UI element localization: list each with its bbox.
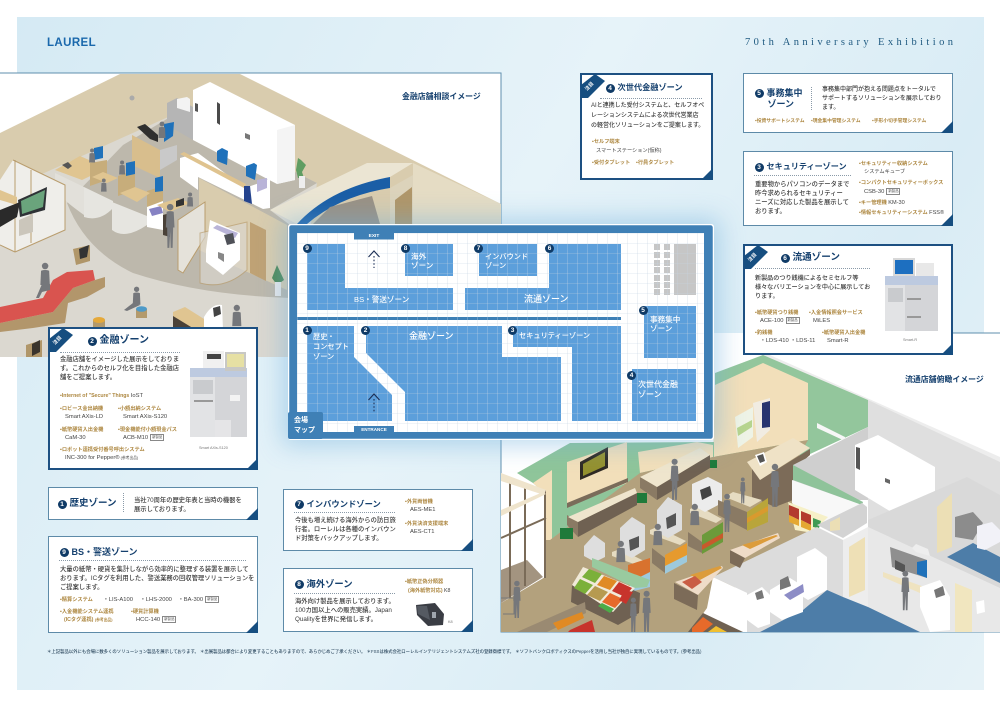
heading: 4 bbox=[608, 84, 612, 92]
counter bbox=[180, 153, 270, 209]
ENTRANCE label: ENTRANCE bbox=[361, 427, 387, 432]
body text: 重要物からパソコンのデータまで bbox=[755, 180, 849, 188]
body text bbox=[60, 356, 179, 380]
marker: zone 6: 6 bbox=[548, 245, 551, 252]
marker: zone 8: 8 bbox=[404, 245, 407, 252]
map label: マップ bbox=[294, 426, 315, 434]
map label bbox=[294, 416, 315, 434]
glass booth bbox=[0, 160, 65, 252]
product list: スマートステーション(仮称) bbox=[596, 148, 661, 154]
zone label: inbound: インバウンド bbox=[485, 252, 528, 261]
badge bbox=[50, 329, 73, 352]
body text bbox=[822, 85, 942, 111]
body text: ド対策をバックアップします。 bbox=[295, 534, 383, 542]
product list: Smart AXis-S120 bbox=[123, 414, 167, 420]
body text: ります。 bbox=[755, 292, 779, 300]
body text: 舗をご提案します。 bbox=[60, 374, 116, 380]
heading: 次世代金融ゾーン bbox=[618, 83, 683, 92]
body text: 事務集中部門が抱える問題点をトータルで bbox=[822, 87, 936, 93]
product list: ▪紙幣硬貨入出金機 bbox=[822, 330, 865, 336]
badge bbox=[582, 75, 605, 98]
gondola D bbox=[718, 500, 747, 530]
badge bbox=[745, 246, 768, 269]
product list: ▪ロビース金出納機 bbox=[60, 406, 103, 412]
machine: Smart-R bbox=[885, 258, 938, 331]
zone label: history bbox=[313, 332, 349, 361]
heading: セキュリティーゾーン bbox=[766, 162, 847, 171]
marker: zone 3 bbox=[508, 326, 517, 335]
product list bbox=[859, 160, 944, 216]
body text: 海外向け製品を展示しております。 bbox=[295, 598, 395, 604]
heading: 6 bbox=[783, 254, 787, 262]
product list bbox=[405, 578, 450, 594]
body text: す。これからのセルフ化を目指した金融店 bbox=[60, 364, 179, 372]
marker: zone 4: 4 bbox=[630, 372, 633, 379]
service counter bbox=[752, 449, 810, 507]
zone label: BS: BS・警送ゾーン bbox=[354, 295, 409, 304]
marker: zone 7: 7 bbox=[477, 245, 480, 252]
marker: zone 1: 1 bbox=[305, 327, 309, 334]
door bbox=[250, 222, 266, 281]
product list: 新製品 bbox=[207, 597, 217, 601]
body text: レーションシステムによる次世代営業店 bbox=[591, 113, 699, 119]
product list: ▪外貨両替機 bbox=[405, 499, 433, 505]
heading: 5 bbox=[757, 90, 761, 96]
scene caption: retail store: 流通店舗俯瞰イメージ bbox=[905, 375, 984, 384]
produce table bbox=[592, 558, 650, 588]
body text: 新製品のつり銭機によるセミセルフ等 bbox=[755, 274, 858, 282]
product list: ・LDS-410 ・LDS-11 bbox=[760, 338, 815, 344]
panel: floor map bbox=[288, 224, 714, 440]
zone label: inbound bbox=[485, 252, 528, 270]
product list: 新製品 bbox=[888, 189, 898, 193]
heading: 2 bbox=[90, 338, 94, 344]
product list bbox=[60, 596, 219, 623]
zone label: overseas bbox=[411, 252, 433, 270]
product list: ▪紙幣正偽分類器 bbox=[405, 579, 443, 585]
machine caption: K8 bbox=[448, 620, 453, 624]
product list: ▪手形小切手管理システム bbox=[872, 119, 926, 124]
product list: MiLES bbox=[813, 318, 830, 324]
product list: Smart AXis-LD bbox=[65, 414, 103, 420]
product list: ▪紙幣硬貨入出金機 bbox=[60, 427, 103, 433]
product list: ▪入金機能システム連携 bbox=[60, 609, 114, 615]
sofa bbox=[0, 277, 105, 332]
gondola A bbox=[628, 558, 650, 590]
panel: 7 inbound zone bbox=[283, 489, 473, 551]
marker: zone 4 bbox=[627, 371, 636, 380]
body text: 当社70周年の歴史年表と当時の機器を bbox=[134, 496, 242, 504]
heading: 8 bbox=[297, 580, 301, 588]
zone label: next generation bbox=[638, 380, 678, 399]
body text bbox=[134, 496, 242, 512]
heading: 1 bbox=[60, 500, 64, 508]
panel: 5 back office zone bbox=[743, 73, 953, 133]
white shelf bbox=[735, 407, 753, 448]
product list: ・LIS-A100 bbox=[103, 597, 133, 603]
back counter bbox=[167, 98, 193, 140]
teller stations bbox=[147, 201, 163, 230]
illustration: retail store isometric scene bbox=[501, 333, 1000, 632]
product list: ▪現金機能付小額現金パス bbox=[118, 427, 177, 433]
body text: 行者。ローレルは各種のインバウン bbox=[295, 526, 396, 532]
product list: ▪Internet of "Secure" Things IoST bbox=[60, 393, 143, 399]
gondola B bbox=[652, 548, 665, 573]
heading: 3 bbox=[757, 164, 761, 170]
zone label: history: コンセプト bbox=[313, 342, 349, 351]
zone label: inbound: ゾーン bbox=[485, 261, 506, 270]
product list: ▪セルフ端末 bbox=[592, 139, 620, 145]
low cases bbox=[517, 602, 586, 632]
product list: ▪コンパクトセキュリティーボックス bbox=[859, 180, 943, 186]
shoppers and staff bbox=[671, 459, 679, 500]
zone label: history: 歴史・ bbox=[313, 332, 335, 341]
heading: 9 bbox=[62, 548, 66, 556]
teller desks bbox=[132, 135, 160, 178]
badge: 注目 bbox=[51, 334, 63, 346]
product list: ACE-100 bbox=[760, 318, 784, 324]
marker: zone 2 bbox=[361, 326, 370, 335]
body text bbox=[60, 565, 254, 590]
body text: おります。 bbox=[755, 208, 786, 214]
zone label: next generation: 次世代金融 bbox=[638, 380, 678, 389]
marker: zone 2: 2 bbox=[364, 327, 367, 334]
marker: zone 6 bbox=[545, 244, 554, 253]
poster bbox=[580, 447, 608, 480]
heading: 海外ゾーン bbox=[306, 579, 353, 589]
product list: ▪行員タブレット bbox=[636, 160, 674, 166]
zone label: finance: 金融ゾーン bbox=[409, 331, 454, 341]
product list: ▪受付タブレット bbox=[592, 160, 630, 166]
product list: ▪小額出納システム bbox=[118, 406, 161, 412]
walls bbox=[763, 352, 1000, 470]
body text: 大量の紙幣・硬貨を集計しながら効率的に整理する装置を展示して bbox=[60, 566, 249, 572]
product list: ▪情報セキュリティーシステム FSS® bbox=[859, 210, 944, 216]
body text: 金融店舗をイメージした展示をしておりま bbox=[60, 356, 179, 362]
marker: zone 1 bbox=[302, 326, 312, 335]
rooms lower right bbox=[817, 503, 867, 538]
heading: 歴史ゾーン bbox=[70, 498, 117, 509]
zone label: overseas: 海外 bbox=[411, 252, 426, 261]
scene caption: financial branch: 金融店舗相談イメージ bbox=[402, 92, 481, 101]
product list: ▪紙幣硬貨つり銭機 bbox=[755, 310, 798, 316]
product list: ▪キー管理機 KM-30 bbox=[859, 200, 905, 206]
ATM booth bbox=[200, 222, 247, 285]
body text: 今後も増え続ける海外からの訪日旅 bbox=[295, 516, 396, 524]
product list: ▪ロボット連携受付番号呼出システム bbox=[60, 447, 145, 453]
body text: サポートするソリューションを展示しており bbox=[822, 96, 942, 102]
product list bbox=[60, 393, 177, 461]
body text: ニーズに対応した製品を展示して bbox=[755, 198, 849, 206]
badge: 注目 bbox=[583, 80, 595, 92]
footnote: ＊上記製品以外にも会場に数多くのソリューション製品を展示しております。 ＊出展製品は都合により変更することもありますので、あらかじめご了承ください。 ＊FSSは株式会社ローレルインテリジェントシステムズ社の登録商標です。 ＊ソフトバンクロボティクスのPepperを活用し当社が独自に実現しているものです。(参考出品) bbox=[47, 649, 701, 654]
body text bbox=[295, 516, 396, 542]
gondola C bbox=[688, 532, 702, 553]
checkout lanes bbox=[612, 549, 648, 567]
product list: ▪投資サポートシステム bbox=[755, 119, 805, 124]
product list: HCC-140 bbox=[136, 617, 160, 623]
logo: LAUREL: LAUREL bbox=[47, 37, 96, 49]
machine caption: Smart-R bbox=[903, 338, 917, 342]
heading: インバウンドゾーン bbox=[306, 499, 381, 509]
marker: zone 3: 3 bbox=[511, 327, 514, 334]
product list: ▪外貨決済支援端末 bbox=[405, 521, 448, 527]
title: 70th Anniversary Exhibition: 70th Anniversary Exhibition bbox=[745, 37, 956, 48]
heading: 7 bbox=[297, 500, 301, 508]
heading: BS・警送ゾーン bbox=[72, 547, 138, 557]
machine: K8 bbox=[416, 603, 444, 626]
marker: zone 9: 9 bbox=[305, 245, 309, 252]
product list bbox=[405, 498, 448, 535]
heading: 事務集中 bbox=[766, 88, 803, 98]
product list: CaM-30 bbox=[65, 435, 86, 441]
product list: ▪現金集中管理システム bbox=[811, 119, 861, 124]
heading: 流通ゾーン bbox=[792, 252, 840, 263]
panel: 8 overseas zone bbox=[283, 568, 473, 632]
heading: ゾーン bbox=[768, 99, 794, 109]
plant bbox=[296, 158, 306, 178]
product list: ・BA-300 bbox=[178, 597, 203, 603]
inner room bbox=[793, 427, 868, 500]
marker: zone 9 bbox=[302, 244, 312, 253]
back shelf right bbox=[640, 477, 657, 500]
window bbox=[501, 478, 545, 603]
machine caption: Smart AXis-S120 bbox=[199, 446, 228, 450]
panel: 9 BS zone bbox=[48, 536, 258, 633]
body text: ご提案します。 bbox=[60, 584, 103, 590]
body text: 展示しております。 bbox=[134, 506, 190, 512]
panel: 1 history zone bbox=[48, 487, 258, 520]
back shelf left bbox=[567, 478, 628, 508]
marker: zone 7 bbox=[474, 244, 483, 253]
product list bbox=[755, 118, 926, 124]
plant bbox=[272, 265, 284, 285]
product list: Smart-R bbox=[827, 338, 849, 344]
body text: Qualityを世界に発信します。 bbox=[295, 616, 377, 622]
product list: システムキューブ bbox=[864, 169, 905, 175]
product list: ▪硬貨計算機 bbox=[131, 609, 159, 615]
product list: ・LHS-2000 bbox=[140, 597, 172, 603]
refrigerated case bbox=[788, 502, 828, 533]
machine: Smart AXis-S120 bbox=[190, 351, 247, 437]
product list: CSB-30 bbox=[864, 189, 884, 195]
zone label: back office bbox=[650, 315, 680, 333]
zone label: back office: 事務集中 bbox=[650, 315, 680, 324]
body text: おります。ICタグを利用した、警送業務の回収管理ソリューションを bbox=[60, 574, 254, 582]
body text: ます。 bbox=[822, 105, 839, 111]
product list: 新製品 bbox=[164, 617, 174, 621]
body text bbox=[591, 102, 704, 129]
marker: zone 8 bbox=[401, 244, 410, 253]
product list: ACB-M10 bbox=[123, 435, 148, 441]
illustration: financial branch isometric scene bbox=[0, 73, 501, 357]
panel: 2 finance zone bbox=[48, 327, 258, 470]
marker: zone 5 bbox=[638, 306, 648, 315]
EXIT label: EXIT bbox=[369, 234, 379, 239]
body text: 様々なバリエーションを中心に展示してお bbox=[755, 284, 870, 290]
zone label: history: ゾーン bbox=[313, 352, 334, 361]
product list: ▪入金情報照会サービス bbox=[809, 310, 863, 316]
body text: の軽営化ソリューションをご提案します。 bbox=[591, 123, 704, 129]
panel: 3 security zone bbox=[743, 151, 953, 226]
badge: 注目 bbox=[746, 251, 758, 263]
zone label: next generation: ゾーン bbox=[638, 390, 662, 399]
body text bbox=[755, 180, 849, 214]
marker: zone 5: 5 bbox=[641, 307, 645, 314]
panel: 6 retail zone bbox=[743, 244, 953, 355]
product list: AES-ME1 bbox=[410, 507, 435, 513]
zone label: back office: ゾーン bbox=[650, 324, 672, 333]
product list: 新製品 bbox=[788, 318, 798, 322]
heading bbox=[755, 88, 803, 109]
zone label: retail: 流通ゾーン bbox=[524, 294, 569, 304]
body text bbox=[295, 598, 395, 622]
product list bbox=[755, 309, 866, 344]
product list: INC-300 for Pepper® (参考出品) bbox=[65, 455, 138, 461]
product list bbox=[592, 138, 674, 166]
product list: (ICタグ連携) (参考出品) bbox=[64, 617, 113, 623]
product list: (海外紙幣対応) K8 bbox=[408, 588, 450, 594]
product list: ▪精算システム bbox=[60, 597, 93, 603]
map label: 会場 bbox=[294, 417, 308, 424]
panel: 4 next generation zone bbox=[580, 73, 713, 180]
zone label: overseas: ゾーン bbox=[411, 261, 433, 270]
product list: ▪セキュリティー収納システム bbox=[859, 161, 928, 167]
product list: AES-CT1 bbox=[410, 529, 434, 535]
product list: 新製品 bbox=[152, 435, 162, 439]
product list: ▪釣銭機 bbox=[755, 330, 772, 336]
body text: 100カ国以上への販売実績。Japan bbox=[295, 606, 392, 614]
cabinets bbox=[193, 82, 295, 184]
body text: 昨今求められるセキュリティー bbox=[755, 190, 843, 196]
zone label: security: セキュリティーゾーン bbox=[519, 331, 590, 340]
body text bbox=[755, 274, 870, 300]
heading: 金融ゾーン bbox=[100, 335, 149, 346]
body text: AIと連携した受付システムと、セルフオペ bbox=[591, 103, 704, 109]
floor bbox=[501, 440, 820, 632]
